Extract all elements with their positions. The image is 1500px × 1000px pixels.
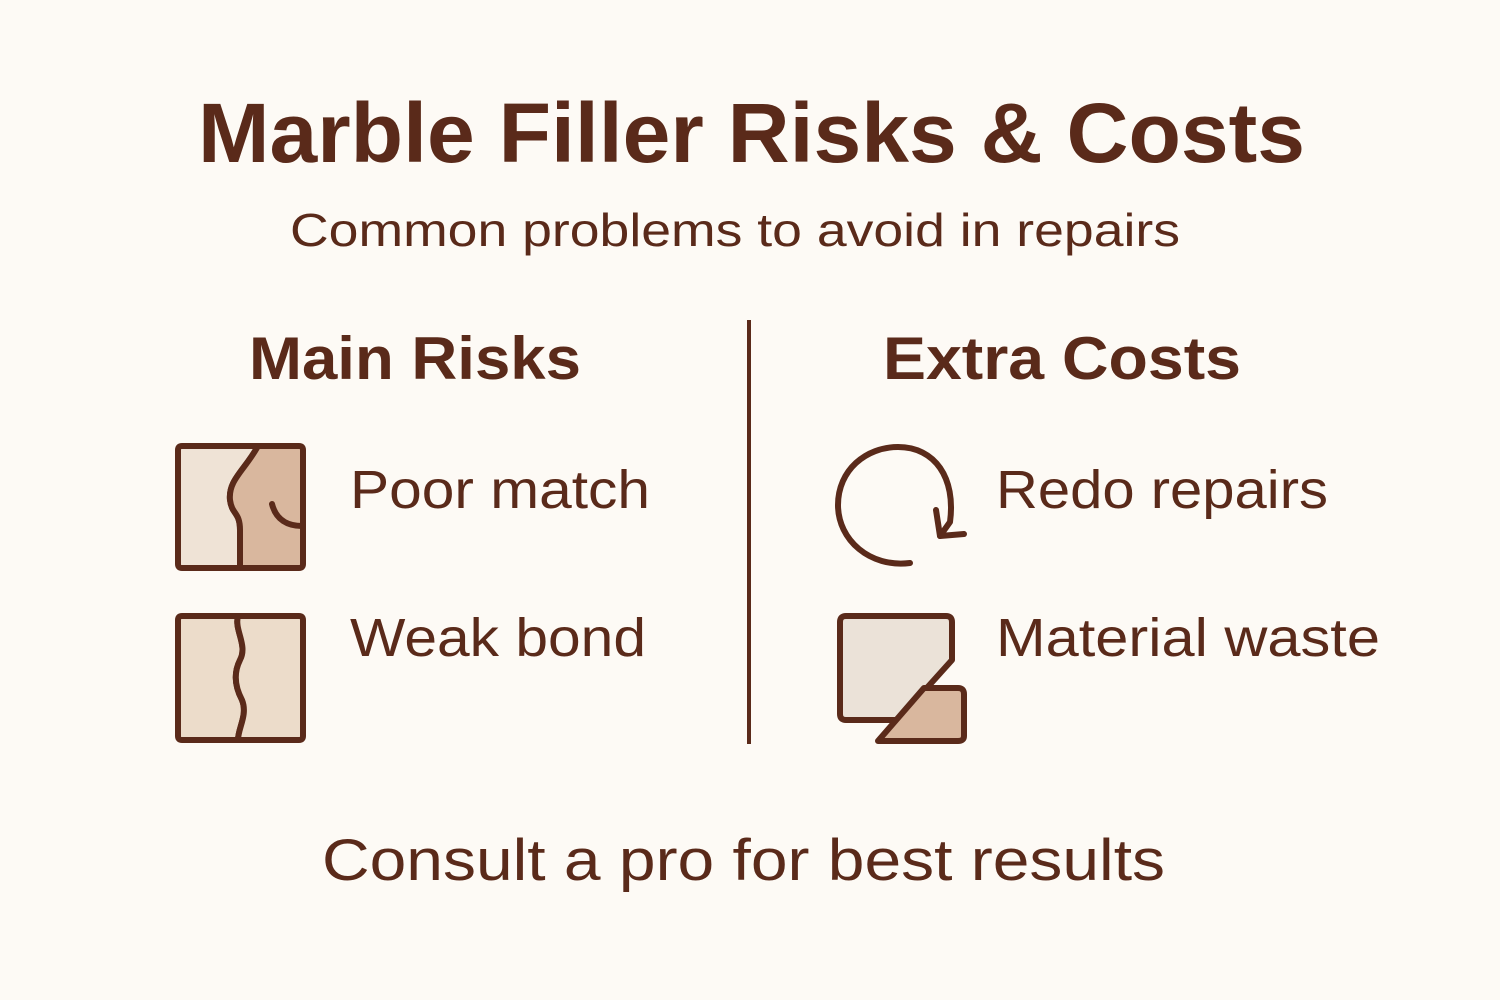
icon: weak bond bbox=[178, 616, 303, 740]
text: weak bond: Weak bond bbox=[350, 608, 646, 668]
text: material waste: Material waste bbox=[996, 608, 1380, 668]
footer callout: Consult a pro for best results bbox=[322, 828, 1165, 893]
text: poor match: Poor match bbox=[350, 460, 650, 520]
panel: main risks bbox=[178, 325, 650, 740]
icon: material waste bbox=[840, 616, 964, 741]
text: redo repairs: Redo repairs bbox=[996, 460, 1328, 520]
title: Marble Filler Risks & Costs bbox=[198, 86, 1305, 180]
heading: extra costs: Extra Costs bbox=[883, 325, 1241, 392]
panel: extra costs bbox=[838, 325, 1380, 741]
subtitle: Common problems to avoid in repairs bbox=[290, 204, 1180, 256]
heading: main risks: Main Risks bbox=[249, 325, 581, 392]
divider line bbox=[747, 320, 751, 744]
icon: poor match bbox=[178, 446, 303, 568]
icon: redo arrow bbox=[838, 447, 964, 564]
